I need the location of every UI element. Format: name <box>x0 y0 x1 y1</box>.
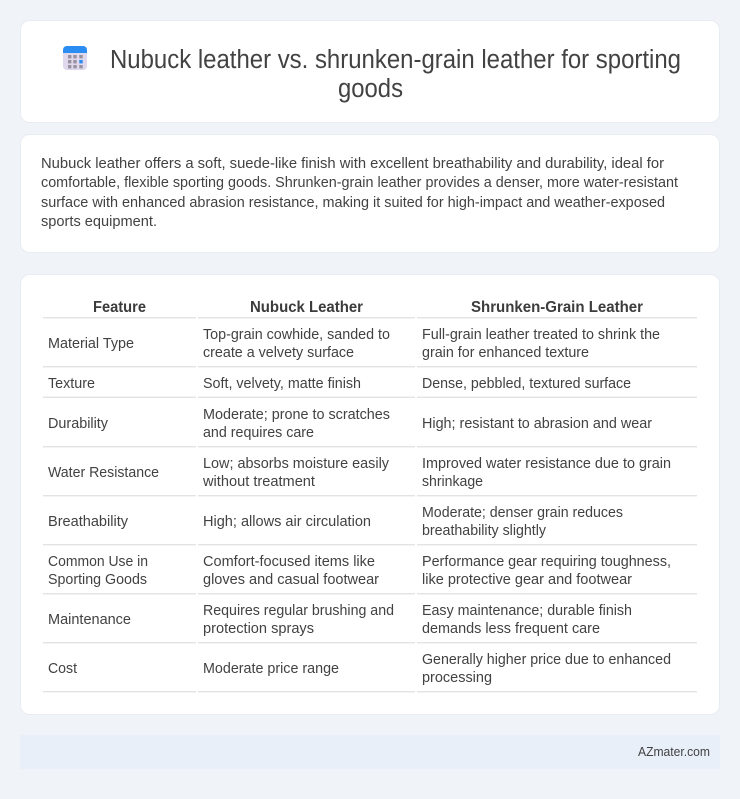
row: maintenance <box>48 603 632 637</box>
row: texture <box>48 376 631 392</box>
row: common use: Sporting Goods <box>48 572 147 588</box>
row: texture: Dense, pebbled, textured surface <box>422 376 631 392</box>
footer: AZmater.com <box>638 744 710 759</box>
summary text: sports equipment. <box>41 214 157 230</box>
summary text <box>41 156 678 230</box>
row: durability: High; resistant to abrasion and wear <box>422 416 652 432</box>
row: cost: Generally higher price due to enhanced <box>422 652 671 668</box>
row: common use <box>48 554 671 588</box>
row: maintenance: Requires regular brushing and <box>203 603 394 619</box>
row: durability: Durability <box>48 416 109 432</box>
summary text: comfortable, flexible sporting goods. Shrunken-grain leather provides a denser, more water-resistant <box>41 175 678 191</box>
row: texture: Soft, velvety, matte finish <box>203 376 361 392</box>
row: common use: Performance gear requiring toughness, <box>422 554 671 570</box>
row: maintenance: Easy maintenance; durable finish <box>422 603 632 619</box>
row: common use: like protective gear and footwear <box>422 572 632 588</box>
row: maintenance: demands less frequent care <box>422 621 600 637</box>
row: water resistance: without treatment <box>202 474 315 490</box>
row: water resistance: Water Resistance <box>48 465 159 481</box>
row: breathability <box>48 505 623 539</box>
row: durability: Moderate; prone to scratches <box>203 407 390 423</box>
title: goods <box>338 75 403 103</box>
title <box>110 46 681 103</box>
row: material type: grain for enhanced texture <box>422 345 589 361</box>
row: maintenance: Maintenance <box>48 612 131 628</box>
row: durability <box>48 407 652 441</box>
row: cost <box>48 652 671 686</box>
icon: calendar <box>63 46 87 70</box>
row: breathability: breathability slightly <box>422 523 547 539</box>
table header: Feature <box>93 299 146 316</box>
row: durability: and requires care <box>203 425 314 441</box>
row: material type: Full-grain leather treated to shrink the <box>422 327 660 343</box>
row: breathability: Breathability <box>48 514 129 530</box>
row: cost: Cost <box>48 661 77 677</box>
row: material type: Material Type <box>48 336 134 352</box>
row: common use: gloves and casual footwear <box>203 572 379 588</box>
footer <box>20 735 720 769</box>
row: water resistance: Improved water resistance due to grain <box>422 456 671 472</box>
table header <box>93 299 643 316</box>
summary text: surface with enhanced abrasion resistance, making it suited for high-impact and weather-exposed <box>41 195 665 211</box>
row: material type: create a velvety surface <box>203 345 354 361</box>
row: material type <box>48 327 660 361</box>
row: water resistance: shrinkage <box>422 474 483 490</box>
title: Nubuck leather vs. shrunken-grain leather for sporting <box>110 46 681 74</box>
row: water resistance: Low; absorbs moisture easily <box>203 456 390 472</box>
panel: comparison table <box>20 274 720 714</box>
panel: title card <box>20 20 720 122</box>
panel: summary <box>20 134 720 252</box>
table header: Nubuck Leather <box>250 299 363 316</box>
row: common use: Comfort-focused items like <box>203 554 375 570</box>
summary text: Nubuck leather offers a soft, suede-like finish with excellent breathability and durability, ideal for <box>41 156 664 172</box>
row: material type: Top-grain cowhide, sanded to <box>203 327 390 343</box>
row: cost: Moderate price range <box>203 661 339 677</box>
row: texture: Texture <box>48 376 95 392</box>
row: maintenance: protection sprays <box>203 621 314 637</box>
table header: Shrunken-Grain Leather <box>471 299 643 316</box>
row: water resistance <box>48 456 671 490</box>
row: breathability: High; allows air circulation <box>203 514 371 530</box>
row: common use: Common Use in <box>48 554 148 570</box>
row: breathability: Moderate; denser grain reduces <box>422 505 623 521</box>
row: cost: processing <box>422 670 492 686</box>
